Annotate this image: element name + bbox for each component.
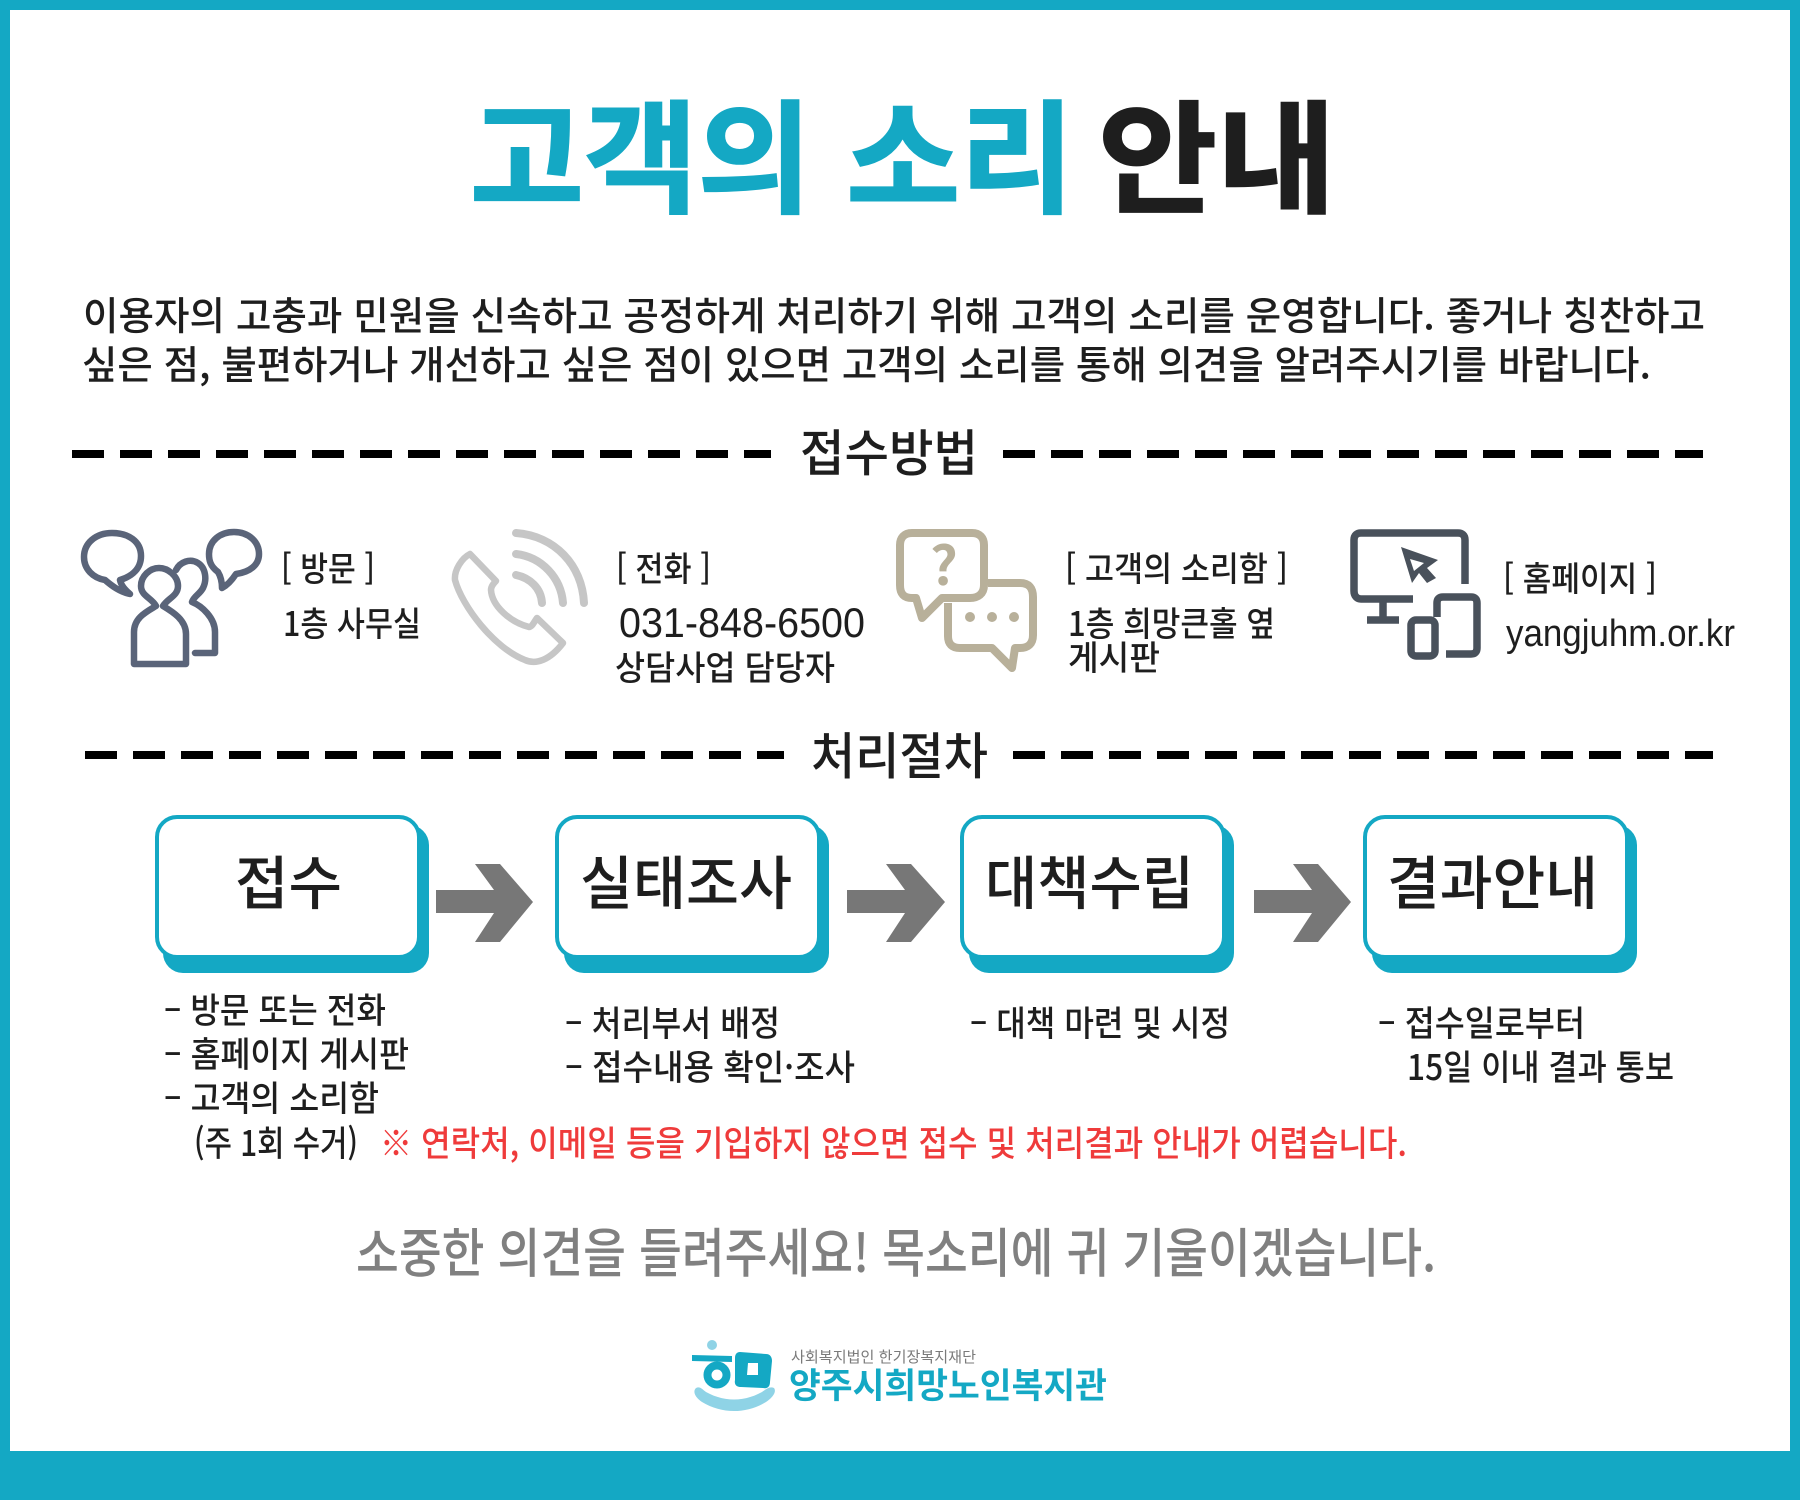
title xyxy=(470,62,1336,239)
arrow 2 xyxy=(847,864,945,942)
step 4 box: 결과안내 xyxy=(1387,837,1598,921)
logo: 사회복지법인 한기장복지재단 xyxy=(791,1346,976,1367)
notice: ※ 연락처, 이메일 등을 기입하지 않으면 접수 및 처리결과 안내가 어렵습니다. xyxy=(380,1116,1407,1167)
logo xyxy=(692,1340,1107,1411)
step 2 details: – 접수내용 확인·조사 xyxy=(565,1040,855,1091)
icon: people talking xyxy=(84,532,259,664)
step 1 details xyxy=(164,983,409,1167)
icon: question chat bubbles xyxy=(900,522,1033,668)
icon: phone xyxy=(455,533,584,662)
step 4 details xyxy=(1378,996,1674,1091)
intro text: 이용자의 고충과 민원을 신속하고 공정하게 처리하기 위해 고객의 소리를 운영합니다. 좋거나 칭찬하고 xyxy=(83,286,1705,342)
step 1 details: – 고객의 소리함 xyxy=(164,1071,379,1122)
intro text: 싶은 점, 불편하거나 개선하고 싶은 점이 있으면 고객의 소리를 통해 의견을 알려주시기를 바랍니다. xyxy=(82,335,1651,391)
title: 안내 xyxy=(1098,62,1336,239)
label: homepage: [ 홈페이지 ] xyxy=(1503,552,1657,601)
logo: 양주시희망노인복지관 xyxy=(789,1358,1107,1409)
step 3 details: – 대책 마련 및 시정 xyxy=(970,996,1230,1047)
step 4 details: 15일 이내 결과 통보 xyxy=(1407,1040,1674,1091)
label: visit xyxy=(281,542,421,646)
icon: question chat bubbles: ? xyxy=(930,522,958,601)
label: phone xyxy=(615,542,865,690)
heading: reception methods: 접수방법 xyxy=(800,414,978,486)
step 2 box xyxy=(557,817,829,973)
icon: monitor and devices xyxy=(1354,533,1477,656)
heading: process: 처리절차 xyxy=(811,717,988,789)
label: homepage xyxy=(1503,552,1735,655)
step 1 details: – 홈페이지 게시판 xyxy=(164,1027,409,1078)
label: phone: 031-848-6500 xyxy=(619,599,865,646)
step 4 box xyxy=(1365,817,1637,973)
label: visit: 1층 사무실 xyxy=(283,597,421,646)
closing message: 소중한 의견을 들려주세요! 목소리에 귀 기울이겠습니다. xyxy=(356,1212,1436,1288)
step 3 box: 대책수립 xyxy=(985,837,1194,921)
step 2 details: – 처리부서 배정 xyxy=(565,996,780,1047)
step 4 details: – 접수일로부터 xyxy=(1378,996,1585,1047)
title: 고객의 소리 xyxy=(470,62,1074,239)
step 2 details xyxy=(565,996,855,1091)
label: visit: [ 방문 ] xyxy=(281,542,375,591)
label: suggestion box: [ 고객의 소리함 ] xyxy=(1065,542,1288,591)
step 1 details: (주 1회 수거) xyxy=(194,1116,358,1167)
label: suggestion box: 게시판 xyxy=(1068,631,1160,680)
label: suggestion box xyxy=(1065,542,1288,680)
step 1 box xyxy=(157,817,429,973)
label: phone: 상담사업 담당자 xyxy=(615,641,835,690)
step 3 box xyxy=(962,817,1234,973)
step 1 box: 접수 xyxy=(235,837,342,921)
label: suggestion box: 1층 희망큰홀 옆 xyxy=(1068,597,1275,646)
label: homepage: yangjuhm.or.kr xyxy=(1506,613,1735,655)
arrow 1 xyxy=(436,864,533,942)
step 1 details: – 방문 또는 전화 xyxy=(164,983,386,1034)
intro text xyxy=(82,286,1705,391)
step 2 box: 실태조사 xyxy=(580,837,792,921)
arrow 3 xyxy=(1254,864,1351,942)
label: phone: [ 전화 ] xyxy=(616,542,711,591)
